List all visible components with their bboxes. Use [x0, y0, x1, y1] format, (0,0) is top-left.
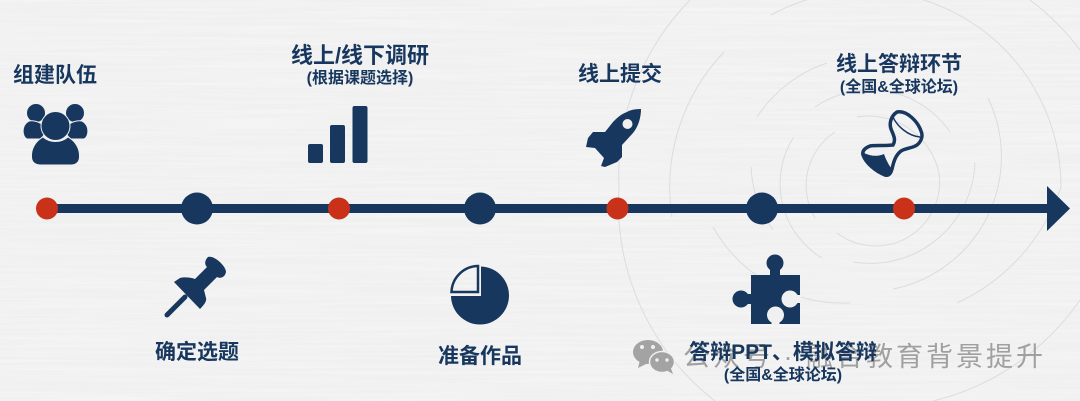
step 5: submit heading: 线上提交 [578, 62, 662, 86]
research subheading: (根据课题选择) [307, 69, 413, 87]
icon: rocket [586, 109, 641, 167]
step 2: topic heading: 确定选题 [155, 340, 239, 364]
step 6: defense preparation heading [689, 341, 877, 384]
step 6: defense preparation heading: 答辩PPT、模拟答辩 [689, 341, 877, 364]
watermark text: 公众号 · 融合教育背景提升 [683, 342, 1046, 372]
step 4: work heading: 准备作品 [438, 345, 522, 368]
icon: hourglass [863, 112, 922, 175]
step 4: pie chart icon [451, 266, 509, 324]
icon: people [23, 104, 88, 165]
step 3: research heading: 线上/线下调研 [291, 43, 429, 68]
step 1: team heading: 组建队伍 [13, 64, 97, 87]
step 7: online defense heading [836, 53, 962, 96]
online defense subheading: (全国&全球论坛) [840, 77, 958, 96]
timeline arrow [47, 186, 1070, 231]
watermark icon [633, 340, 674, 374]
step 3: research heading [291, 43, 429, 87]
step 6: puzzle icon [732, 254, 801, 325]
step 7: online defense heading: 线上答辩环节 [836, 53, 962, 76]
icon: bar chart [308, 106, 368, 163]
defense preparation subheading: (全国&全球论坛) [724, 365, 842, 384]
step 2: pin icon [167, 257, 226, 315]
timeline nodes [36, 192, 915, 224]
concentric arcs [618, 0, 1080, 401]
watermark [633, 340, 1046, 374]
